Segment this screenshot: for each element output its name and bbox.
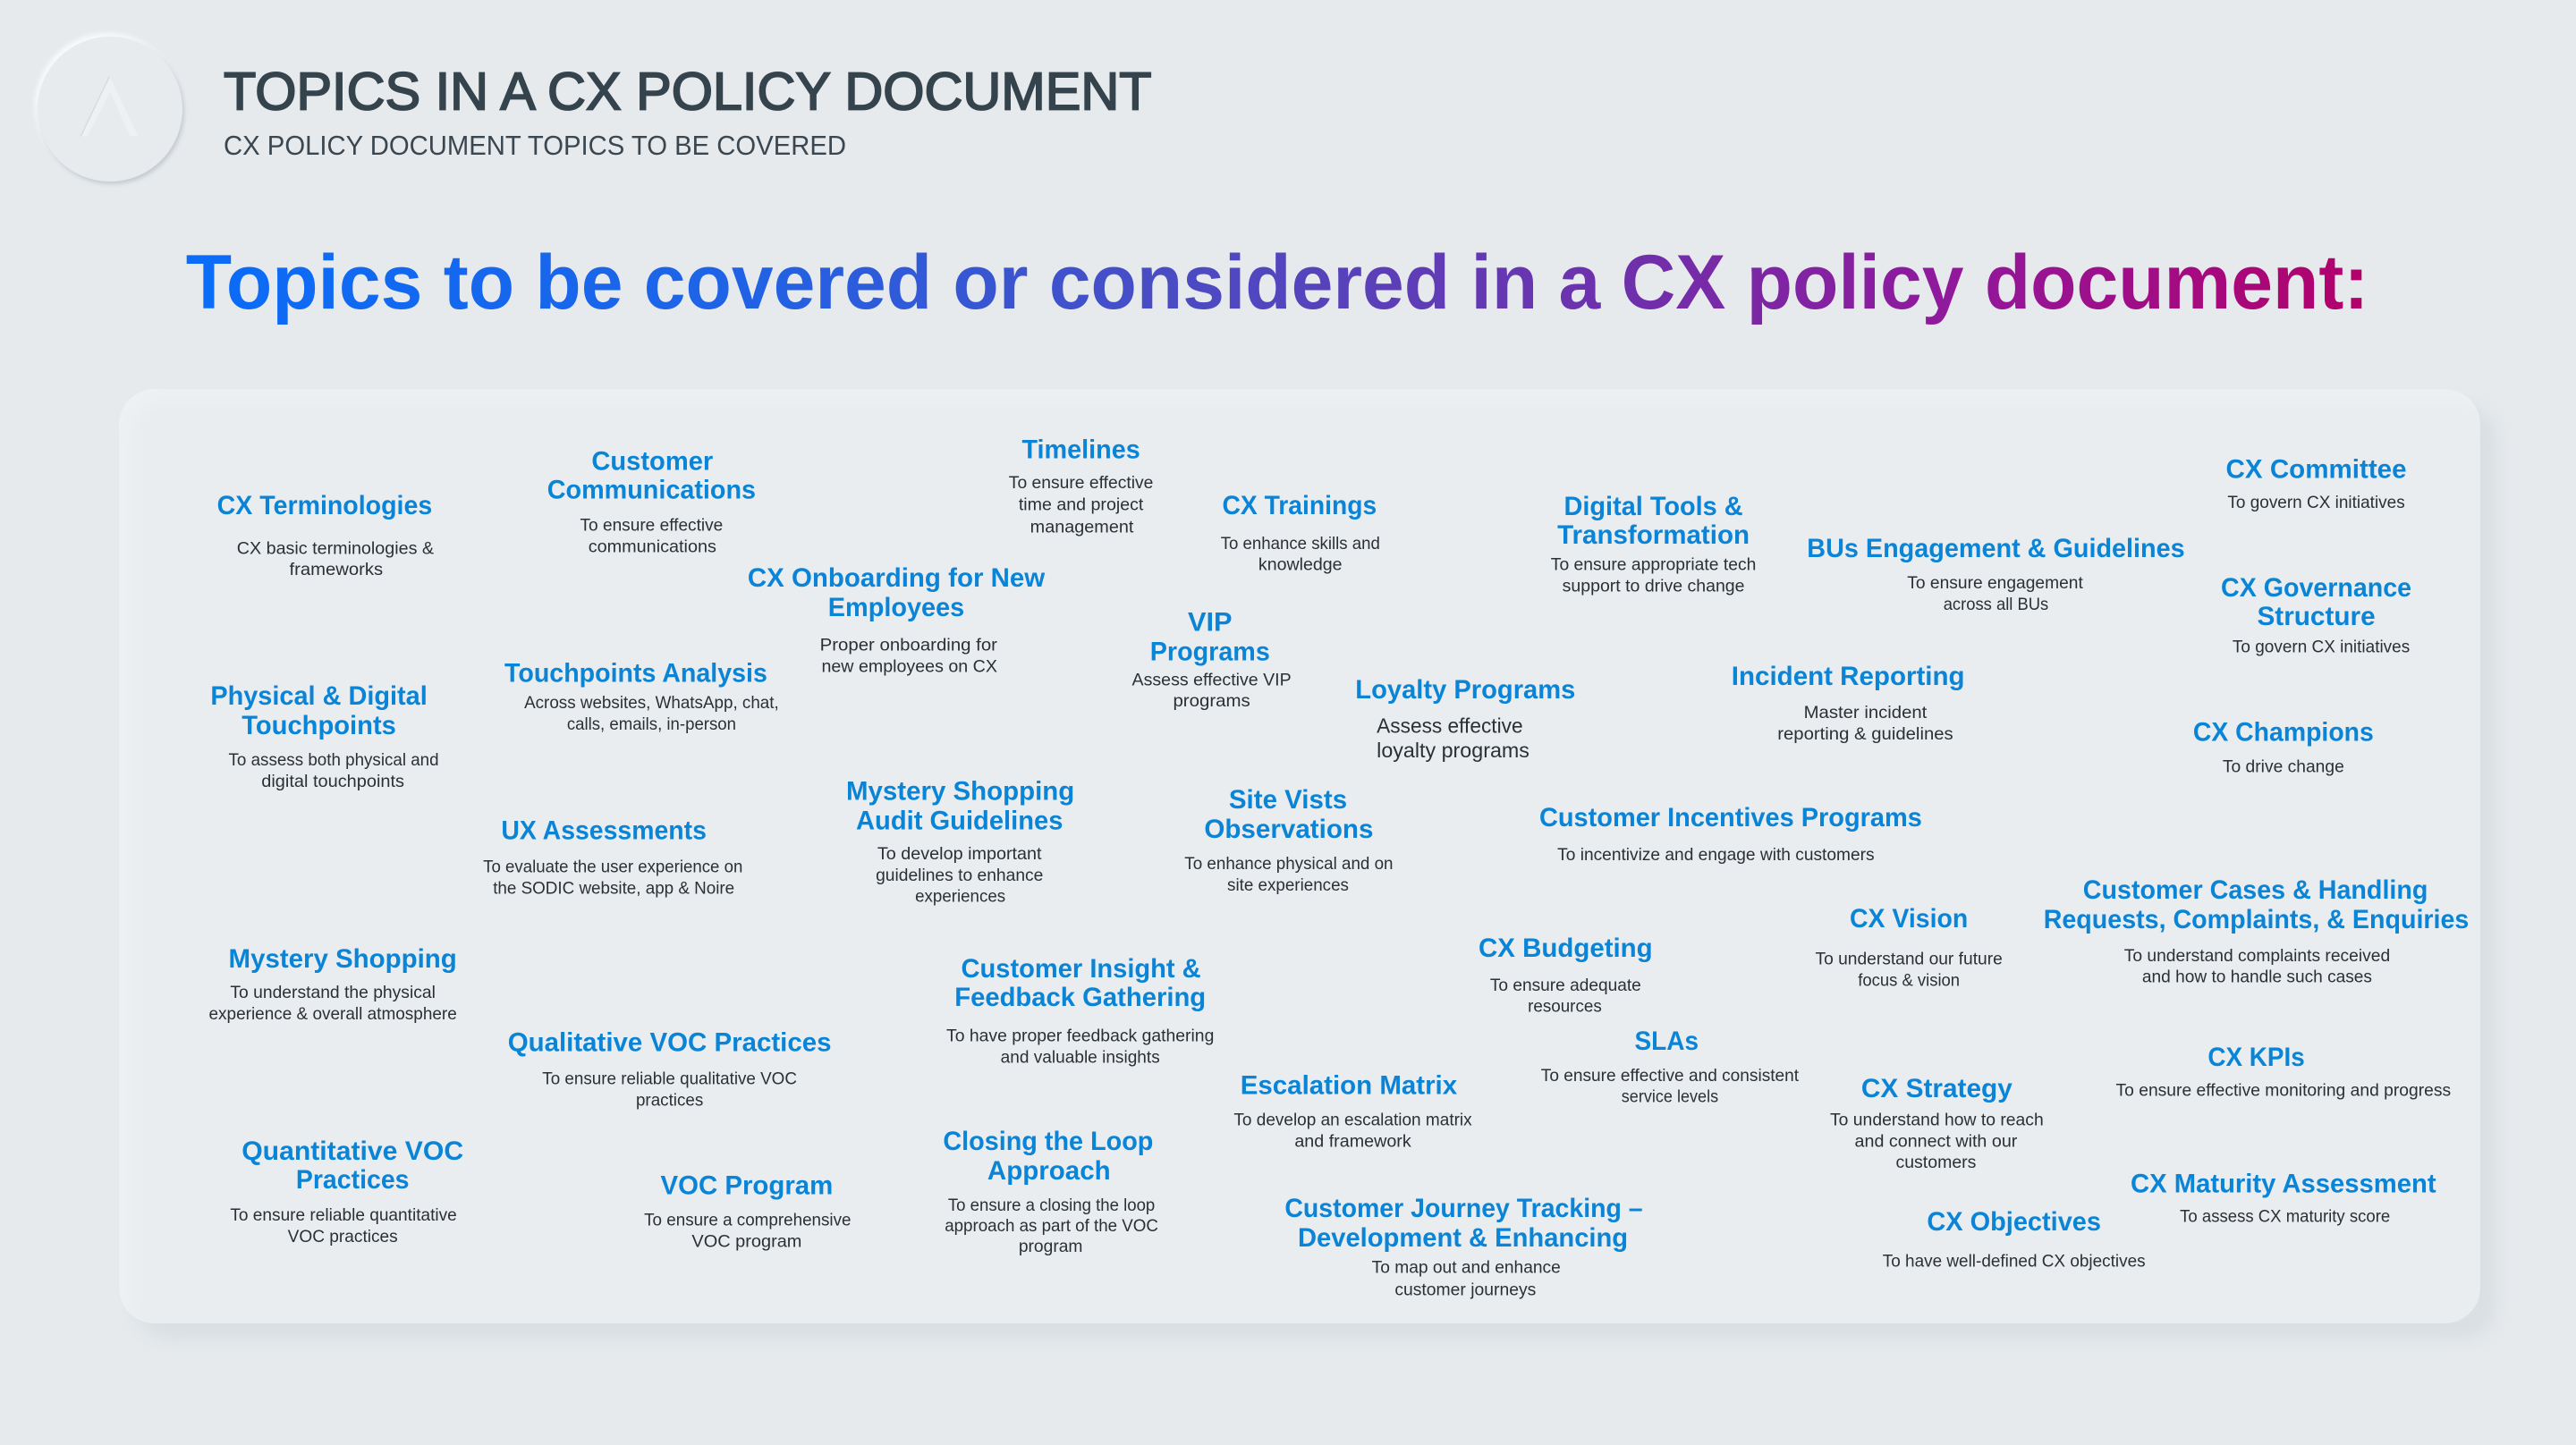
topic: CX Committee — [2226, 455, 2407, 512]
topic: Physical & Digital Touchpoints: Physical & Digital — [210, 681, 428, 711]
topic: Customer Incentives Programs: Customer Incentives Programs — [1539, 803, 1922, 832]
topic: Site Vists Observations: Observations — [1204, 815, 1373, 844]
topic: Physical & Digital Touchpoints — [210, 681, 439, 791]
topic: CX Governance Structure: To govern CX initiatives — [2233, 638, 2410, 657]
topic: Loyalty Programs: Loyalty Programs — [1355, 675, 1575, 705]
topic: Site Vists Observations: To enhance physical and on — [1184, 854, 1394, 874]
topic: CX Committee: To govern CX initiatives — [2227, 493, 2405, 512]
topic: Mystery Shopping: Mystery Shopping — [229, 944, 457, 974]
topic: Quantitative VOC Practices: Quantitative VOC — [242, 1137, 463, 1166]
topic: Digital Tools & Transformation: Transformation — [1557, 520, 1750, 550]
topic: CX KPIs: To ensure effective monitoring and progress — [2116, 1080, 2451, 1100]
topic: Touchpoints Analysis: Across websites, WhatsApp, chat, — [524, 693, 779, 713]
topic: SLAs — [1541, 1027, 1800, 1107]
topic: UX Assessments: the SODIC website, app & Noire — [493, 878, 734, 898]
panel: topics card — [119, 389, 2480, 1323]
topic: CX Onboarding for New Employees: CX Onboarding for New — [748, 563, 1046, 593]
topic: Mystery Shopping Audit Guidelines — [846, 777, 1074, 907]
topic: CX Trainings — [1221, 491, 1380, 575]
topic: CX Vision — [1815, 904, 2003, 990]
topic: Customer Communications: communications — [589, 537, 716, 557]
topic: Customer Insight & Feedback Gathering: Feedback Gathering — [954, 983, 1206, 1012]
topic: CX Onboarding for New Employees — [748, 563, 1046, 677]
topic: CX Onboarding for New Employees: Proper onboarding for — [820, 636, 997, 655]
topic: VIP Programs: VIP — [1188, 607, 1233, 637]
topic: BUs Engagement & Guidelines: across all BUs — [1944, 595, 2048, 614]
topic: Incident Reporting — [1732, 662, 1965, 744]
topic: Physical & Digital Touchpoints: digital touchpoints — [261, 772, 404, 791]
topic: CX Terminologies: CX basic terminologies & — [237, 538, 434, 558]
topic: VIP Programs: Assess effective VIP — [1132, 670, 1292, 689]
topic: Customer Cases & Handling: Customer Cases & Handling — [2083, 875, 2428, 905]
topic: Customer Journey Tracking: Development & Enhancing — [1298, 1223, 1628, 1253]
topic: CX Terminologies — [217, 491, 434, 579]
topic: Timelines — [1009, 435, 1153, 537]
topic: CX Onboarding for New Employees: Employees — [828, 593, 964, 622]
topic: Customer Cases & Handling: and how to handle such cases — [2142, 968, 2372, 987]
topic: Touchpoints Analysis — [504, 658, 779, 734]
topic: Mystery Shopping Audit Guidelines: experiences — [915, 887, 1005, 907]
topic: Customer Incentives Programs: To incentivize and engage with customers — [1557, 845, 1875, 865]
topic: Closing the Loop Approach: approach as part of the VOC — [945, 1216, 1158, 1236]
topic: Customer Insight & Feedback Gathering: Customer Insight & — [962, 954, 1201, 984]
topic: Customer Insight & Feedback Gathering: and valuable insights — [1001, 1048, 1160, 1068]
subtitle: CX POLICY DOCUMENT TOPICS TO BE COVERED — [224, 131, 846, 161]
topic: SLAs: To ensure effective and consistent — [1541, 1066, 1800, 1086]
topic: Closing the Loop Approach: To ensure a closing the loop — [948, 1196, 1155, 1215]
topic: Closing the Loop Approach: program — [1019, 1237, 1082, 1256]
topic: CX Vision: To understand our future — [1815, 949, 2003, 968]
topic: CX Vision: focus & vision — [1858, 970, 1960, 990]
topic: CX Terminologies: CX Terminologies — [217, 491, 432, 520]
topic: Digital Tools & Transformation — [1551, 492, 1756, 596]
topic: Timelines: management — [1030, 517, 1134, 537]
topic: CX Trainings: CX Trainings — [1223, 491, 1377, 520]
topic: Touchpoints Analysis: calls, emails, in-person — [567, 714, 736, 734]
topic: Site Vists Observations — [1184, 785, 1394, 895]
topic: Escalation Matrix: To develop an escalation matrix — [1233, 1110, 1472, 1129]
topic: Physical & Digital Touchpoints: Touchpoints — [242, 711, 396, 740]
topic: Customer Journey Tracking — [1284, 1194, 1643, 1299]
topic: Customer Cases & Handling: To understand complaints received — [2124, 946, 2390, 966]
topic: Timelines: time and project — [1019, 495, 1144, 515]
topic: BUs Engagement & Guidelines: BUs Engagement & Guidelines — [1807, 534, 2185, 563]
topic: CX Strategy: CX Strategy — [1861, 1074, 2012, 1103]
topic: Digital Tools & Transformation: To ensure appropriate tech — [1551, 555, 1756, 575]
topic: SLAs: service levels — [1622, 1087, 1718, 1107]
topic: Customer Incentives Programs — [1539, 803, 1922, 865]
topic: CX Onboarding for New Employees: new employees on CX — [821, 657, 997, 677]
topic: CX Strategy: To understand how to reach — [1830, 1110, 2044, 1129]
topic: CX Champions: CX Champions — [2193, 718, 2374, 748]
main heading: Topics to be covered or considered in a CX policy document: — [186, 240, 2368, 325]
topic: Customer Communications — [547, 447, 756, 557]
topic: BUs Engagement & Guidelines — [1807, 534, 2185, 614]
topic: CX Objectives: CX Objectives — [1927, 1207, 2101, 1237]
topic: Mystery Shopping: To understand the physical — [230, 983, 436, 1002]
topic: Loyalty Programs: loyalty programs — [1377, 739, 1530, 762]
topic: Incident Reporting: Master incident — [1804, 703, 1928, 722]
topic: Mystery Shopping Audit Guidelines: To develop important — [877, 844, 1042, 864]
topic: VIP Programs: Programs — [1150, 638, 1270, 667]
topic: CX Budgeting: resources — [1528, 997, 1602, 1017]
topic: CX Maturity Assessment: To assess CX maturity score — [2180, 1207, 2390, 1227]
topic: UX Assessments — [483, 816, 742, 898]
topic: CX Objectives — [1883, 1207, 2146, 1271]
topic: Quantitative VOC Practices — [230, 1137, 463, 1246]
topic: CX Trainings: To enhance skills and — [1221, 534, 1380, 553]
icon: logo badge — [38, 37, 182, 182]
topic: Customer Journey Tracking: customer journeys — [1394, 1280, 1537, 1299]
topic: Customer Communications: Communications — [547, 476, 756, 505]
topic: CX KPIs — [2116, 1043, 2451, 1100]
topic: VOC Program: To ensure a comprehensive — [644, 1210, 852, 1230]
topic: Quantitative VOC Practices: VOC practices — [288, 1227, 398, 1246]
topic: Mystery Shopping Audit Guidelines: Audit Guidelines — [856, 807, 1063, 836]
topic: BUs Engagement & Guidelines: To ensure engagement — [1907, 573, 2083, 593]
topic: Customer Journey Tracking: Customer Journey Tracking – — [1284, 1194, 1643, 1223]
topic: Escalation Matrix: Escalation Matrix — [1241, 1070, 1458, 1100]
icon: logo chevron — [80, 76, 139, 136]
topic: Touchpoints Analysis: Touchpoints Analysis — [504, 658, 767, 688]
topic: Loyalty Programs: Assess effective — [1377, 714, 1523, 738]
title: TOPICS IN A CX POLICY DOCUMENT — [224, 61, 1152, 121]
topic: VIP Programs — [1132, 607, 1292, 711]
topic: Loyalty Programs — [1355, 675, 1575, 762]
topic: Customer Communications: Customer — [591, 447, 714, 477]
topic: CX Trainings: knowledge — [1258, 555, 1343, 575]
topic: Site Vists Observations: Site Vists — [1229, 785, 1347, 815]
topic: Mystery Shopping Audit Guidelines: Mystery Shopping — [846, 777, 1074, 807]
topic: CX Vision: CX Vision — [1850, 904, 1968, 934]
topic: Escalation Matrix: and framework — [1294, 1131, 1411, 1151]
topic: Closing the Loop Approach: Approach — [987, 1156, 1111, 1186]
topic: Physical & Digital Touchpoints: To assess both physical and — [229, 750, 439, 770]
topic: Qualitative VOC Practices: Qualitative VOC Practices — [508, 1028, 831, 1058]
topic: Incident Reporting: Incident Reporting — [1732, 662, 1965, 691]
topic: Quantitative VOC Practices: To ensure reliable quantitative — [230, 1205, 457, 1225]
topic: CX Objectives: To have well-defined CX objectives — [1883, 1251, 2146, 1271]
topic: Customer Journey Tracking: To map out and enhance — [1372, 1258, 1561, 1278]
topic: VOC Program — [644, 1170, 852, 1251]
topic: UX Assessments: To evaluate the user experience on — [483, 858, 742, 877]
topic: VOC Program: VOC program — [691, 1231, 801, 1251]
topic: Customer Insight & Feedback Gathering — [946, 954, 1214, 1068]
topic: Mystery Shopping — [209, 944, 457, 1024]
topic: Customer Cases & Handling: Requests, Complaints, & Enquiries — [2044, 905, 2469, 934]
topic: CX Terminologies: frameworks — [289, 560, 383, 579]
topic: Escalation Matrix — [1233, 1070, 1472, 1151]
topic: CX Budgeting: CX Budgeting — [1479, 934, 1653, 963]
topic: CX Champions: To drive change — [2223, 757, 2344, 777]
topic: CX Budgeting: To ensure adequate — [1490, 976, 1641, 995]
topic: SLAs: SLAs — [1634, 1027, 1699, 1056]
topic: Qualitative VOC Practices: To ensure reliable qualitative VOC — [542, 1069, 797, 1088]
topic: CX Maturity Assessment — [2131, 1170, 2436, 1227]
topic: CX KPIs: CX KPIs — [2207, 1043, 2305, 1072]
topic: Closing the Loop Approach — [943, 1127, 1158, 1256]
topic: Incident Reporting: reporting & guidelines — [1777, 724, 1953, 744]
topic: UX Assessments: UX Assessments — [501, 816, 707, 846]
topic: VIP Programs: programs — [1173, 691, 1250, 711]
topic: Quantitative VOC Practices: Practices — [296, 1165, 410, 1195]
topic: CX Strategy: customers — [1895, 1153, 1977, 1172]
topic: Mystery Shopping: experience & overall atmosphere — [209, 1004, 457, 1024]
topic: Qualitative VOC Practices: practices — [636, 1090, 704, 1110]
topic: CX Champions — [2193, 718, 2374, 777]
topic: Closing the Loop Approach: Closing the Loop — [943, 1127, 1153, 1156]
topic: CX Governance Structure — [2221, 573, 2411, 657]
topic: CX Strategy: and connect with our — [1855, 1131, 2018, 1151]
topic: VOC Program: VOC Program — [661, 1170, 833, 1200]
topic: Digital Tools & Transformation: support to drive change — [1563, 577, 1745, 596]
topic: CX Strategy — [1830, 1074, 2044, 1172]
topic: Timelines: To ensure effective — [1009, 473, 1153, 493]
topic: Timelines: Timelines — [1022, 435, 1140, 465]
topic: CX Committee: CX Committee — [2226, 455, 2407, 485]
topic: Customer Communications: To ensure effective — [580, 516, 723, 536]
topic: Qualitative VOC Practices — [508, 1028, 831, 1110]
topic: Customer Cases & Handling — [2044, 875, 2469, 987]
topic: Mystery Shopping Audit Guidelines: guidelines to enhance — [876, 866, 1043, 885]
topic: CX Governance Structure: Structure — [2257, 602, 2376, 631]
topic: Site Vists Observations: site experiences — [1227, 875, 1349, 895]
topic: CX Maturity Assessment: CX Maturity Assessment — [2131, 1170, 2436, 1199]
topic: CX Governance Structure: CX Governance — [2221, 573, 2411, 603]
topic: Digital Tools & Transformation: Digital Tools & — [1564, 492, 1743, 521]
topic: Customer Insight & Feedback Gathering: To have proper feedback gathering — [946, 1027, 1214, 1046]
topic: CX Budgeting — [1479, 934, 1653, 1017]
